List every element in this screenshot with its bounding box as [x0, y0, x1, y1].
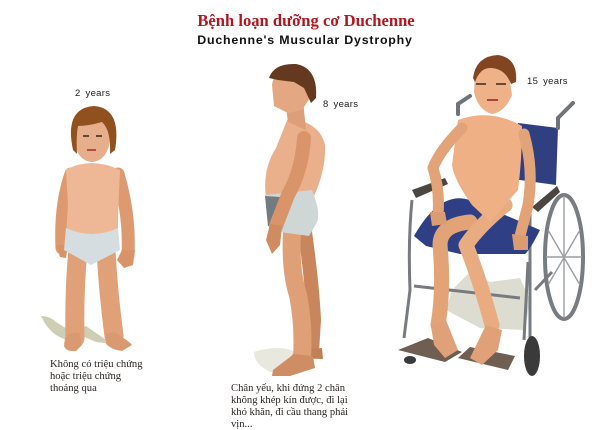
- push handles: [458, 96, 573, 128]
- hair: [269, 64, 316, 103]
- hands: [56, 245, 135, 268]
- legs: [438, 222, 470, 325]
- front leg: [292, 232, 302, 358]
- caption: 2 years: hoặc triệu chứng: [50, 371, 122, 382]
- backrest: [505, 123, 558, 185]
- seat: [414, 198, 540, 254]
- briefs: [265, 190, 318, 236]
- label: 8 years: 8 years: [323, 99, 358, 110]
- arms: [62, 174, 128, 255]
- figure: child at 8 years: [254, 64, 325, 376]
- hands: [430, 212, 528, 250]
- caption: 8 years: Chân yếu, khi đứng 2 chân: [231, 383, 346, 394]
- label: 15 years: 15 years: [527, 76, 568, 87]
- frame: [404, 200, 552, 340]
- armrests: [412, 178, 560, 212]
- briefs: [64, 228, 120, 265]
- heading: English: Duchenne's Muscular Dystrophy: [197, 33, 413, 47]
- head: [272, 70, 310, 113]
- arms: [433, 128, 462, 215]
- floor shadow: [446, 272, 530, 330]
- back foot: [290, 348, 323, 359]
- legs: [75, 250, 114, 338]
- floor shadow: [41, 316, 112, 344]
- large wheel: [545, 195, 583, 319]
- head: [74, 114, 110, 162]
- torso: [66, 163, 120, 236]
- title: [197, 11, 415, 47]
- foot: [272, 354, 315, 376]
- hair: [71, 106, 116, 154]
- caption: 2 years: Không có triệu chứng: [50, 359, 143, 370]
- torso: [452, 115, 522, 222]
- caption: 8 years: không khép kín được, đi lại: [231, 395, 348, 406]
- hand: [266, 224, 282, 254]
- caption: 8 years: khó khăn, đi cầu thang phải: [231, 407, 348, 418]
- torso: [265, 118, 325, 198]
- back leg: [304, 225, 314, 352]
- figure: teenager in wheelchair at 15 years: [398, 55, 583, 376]
- label: 2 years: 2 years: [75, 88, 110, 99]
- floor shadow: [254, 348, 295, 372]
- feet: [64, 332, 132, 351]
- head: [474, 65, 512, 114]
- caption: 2 years: thoảng qua: [50, 383, 97, 394]
- face: [83, 135, 102, 137]
- arm: [276, 138, 304, 226]
- hair: [473, 55, 516, 84]
- footrests: [398, 338, 515, 370]
- feet: [431, 320, 502, 365]
- figure: child at 2 years: [41, 106, 135, 351]
- caption: 8 years: vịn...: [231, 419, 252, 430]
- face: [476, 83, 506, 85]
- neck: [286, 100, 306, 130]
- caster wheels: [524, 336, 540, 376]
- wheelchair: [398, 96, 583, 376]
- heading: Vietnamese: Bệnh loạn dưỡng cơ Duchenne: [197, 11, 415, 30]
